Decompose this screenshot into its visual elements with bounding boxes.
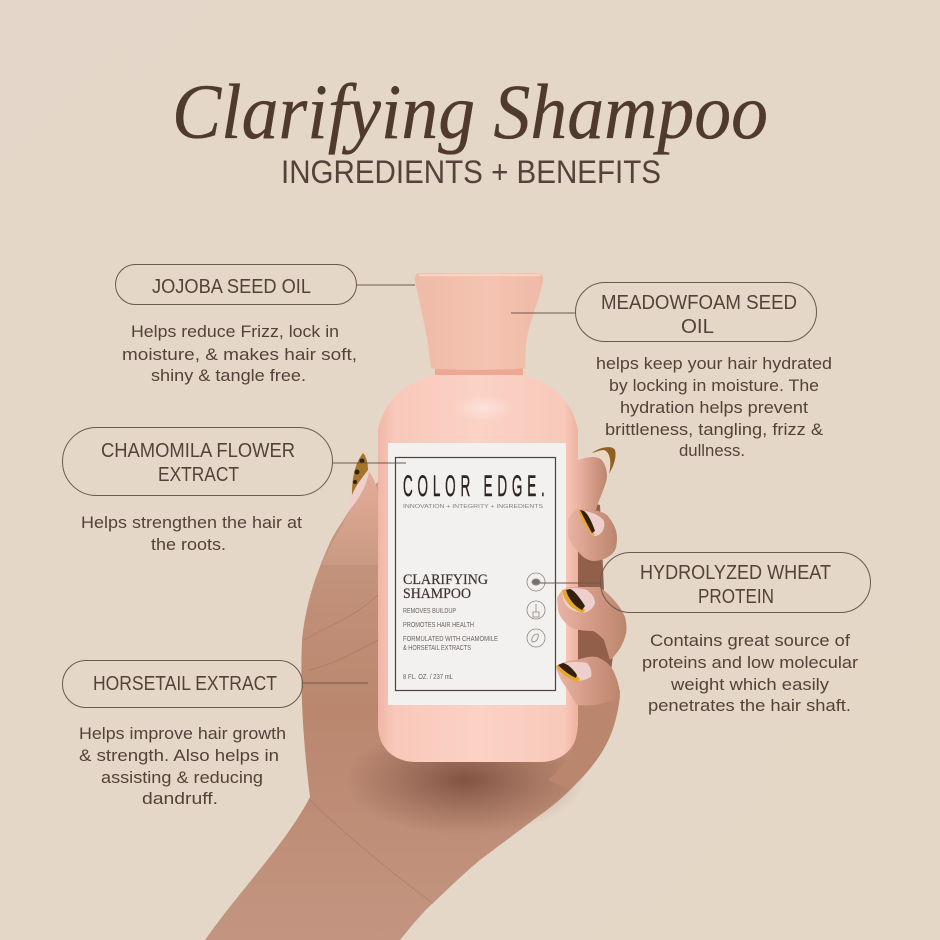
middle finger xyxy=(568,509,617,561)
product claims: & HORSETAIL EXTRACTS xyxy=(403,645,471,652)
shampoo bottle xyxy=(378,273,578,762)
callout: meadowfoam seed oil xyxy=(511,282,832,460)
ring finger xyxy=(557,587,626,660)
brand name: COLOR EDGE. xyxy=(403,469,545,502)
callout: chamomila flower extract: CHAMOMILA FLOWER xyxy=(101,440,295,462)
cap rim highlight xyxy=(419,274,540,276)
callout: meadowfoam seed oil: MEADOWFOAM SEED xyxy=(601,292,797,314)
palm shadow xyxy=(345,725,585,835)
bottle highlight xyxy=(452,394,516,422)
callout: meadowfoam seed oil: dullness. xyxy=(679,441,745,460)
icon: vegan badge xyxy=(527,629,545,647)
callout: jojoba seed oil xyxy=(116,264,415,385)
bottle label: SHAMPOO xyxy=(403,586,471,602)
brand tagline: INNOVATION + INTEGRITY + INGREDIENTS xyxy=(403,504,543,510)
callout: chamomila flower extract xyxy=(62,428,406,554)
middle nail xyxy=(578,510,604,536)
little finger xyxy=(556,657,620,705)
callout: meadowfoam seed oil: helps keep your hair hydrated xyxy=(596,354,832,373)
bottle body xyxy=(378,375,578,762)
callout: jojoba seed oil: shiny & tangle free. xyxy=(151,366,306,385)
callout: hydrolyzed wheat protein: PROTEIN xyxy=(698,586,774,608)
callout: hydrolyzed wheat protein: HYDROLYZED WHEAT xyxy=(640,562,831,584)
callout: hydrolyzed wheat protein: weight which easily xyxy=(670,675,830,694)
product claims: 8 FL. OZ. / 237 mL xyxy=(403,674,453,681)
callout: horsetail extract: Helps improve hair growth xyxy=(79,724,286,743)
bottle collar xyxy=(435,366,523,378)
subtitle: INGREDIENTS + BENEFITS xyxy=(281,154,661,190)
little nail xyxy=(556,662,591,682)
callout: chamomila flower extract: Helps strengthen the hair at xyxy=(81,513,302,532)
bottle label xyxy=(388,443,566,705)
callout: horsetail extract: dandruff. xyxy=(142,789,218,808)
callout: jojoba seed oil: Helps reduce Frizz, lock in xyxy=(131,322,339,341)
product claims xyxy=(403,608,498,681)
icon: sulfate free badge xyxy=(527,601,545,619)
callout: meadowfoam seed oil: brittleness, tangling, frizz & xyxy=(605,420,824,439)
callout: hydrolyzed wheat protein: proteins and low molecular xyxy=(642,653,858,672)
index nail xyxy=(592,447,616,474)
callout: horsetail extract: HORSETAIL EXTRACT xyxy=(93,673,277,695)
palm crease lines xyxy=(304,595,433,903)
product claims: FORMULATED WITH CHAMOMILE xyxy=(403,636,498,643)
product claims: PROMOTES HAIR HEALTH xyxy=(403,622,474,629)
callout: horsetail extract: & strength. Also helps in xyxy=(79,746,279,765)
callout: chamomila flower extract: EXTRACT xyxy=(158,464,239,486)
callout: chamomila flower extract: the roots. xyxy=(151,535,226,554)
lower hand beside the bottle xyxy=(548,690,620,790)
callout: horsetail extract xyxy=(62,660,368,808)
bottle cap xyxy=(415,273,543,370)
callout: hydrolyzed wheat protein: Contains great source of xyxy=(650,631,850,650)
callout: hydrolyzed wheat protein xyxy=(540,552,870,715)
thumb xyxy=(322,453,381,565)
product claims: REMOVES BUILDUP xyxy=(403,608,456,615)
callout: jojoba seed oil: moisture, & makes hair soft, xyxy=(122,345,357,364)
icon: cruelty free badge xyxy=(527,573,545,591)
thumb nail xyxy=(348,453,369,512)
title: Clarifying Shampoo xyxy=(172,68,768,155)
ring nail xyxy=(562,588,595,613)
finger connectors xyxy=(578,500,613,690)
callout: jojoba seed oil: JOJOBA SEED OIL xyxy=(152,276,311,298)
callout: meadowfoam seed oil: hydration helps prevent xyxy=(620,398,808,417)
fingers over the bottle xyxy=(548,447,626,790)
callout: horsetail extract: assisting & reducing xyxy=(101,768,263,787)
callout: meadowfoam seed oil: by locking in moisture. The xyxy=(609,376,819,395)
callout: meadowfoam seed oil: OIL xyxy=(681,316,714,338)
product name: CLARIFYING xyxy=(403,572,489,588)
callout: hydrolyzed wheat protein: penetrates the hair shaft. xyxy=(648,696,851,715)
hand: palm and wrist xyxy=(205,453,620,940)
index finger xyxy=(578,457,607,512)
